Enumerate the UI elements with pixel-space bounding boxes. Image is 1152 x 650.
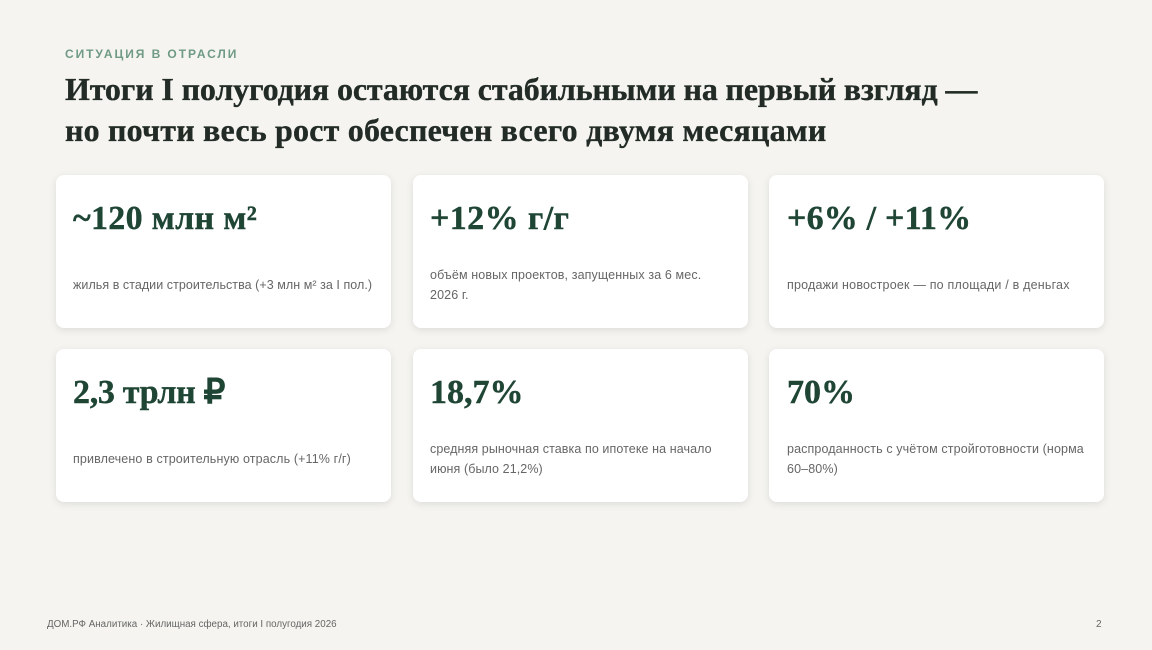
- page number: 2: [1096, 619, 1102, 630]
- footer source: ДОМ.РФ Аналитика · Жилищная сфера, итоги I полугодия 2026: [47, 619, 337, 630]
- description: [787, 442, 1084, 476]
- stat: 2.3 trillion: 2,3 трлн ₽: [73, 374, 225, 411]
- card: mortgage rate: [413, 349, 748, 502]
- eyebrow label: СИТУАЦИЯ В ОТРАСЛИ: [65, 47, 238, 61]
- description: распроданность с учётом стройготовности (норма: [787, 442, 1084, 456]
- stat: 12 percent: +12% г/г: [430, 200, 569, 237]
- description: июня (было 21,2%): [430, 462, 543, 476]
- description: средняя рыночная ставка по ипотеке на начало: [430, 442, 712, 456]
- description: объём новых проектов, запущенных за 6 мес.: [430, 268, 701, 282]
- card: sales: [769, 175, 1104, 328]
- description: [430, 268, 701, 302]
- stat: 18.7 percent: 18,7%: [430, 374, 524, 411]
- stat: 6 and 11 percent: +6% / +11%: [787, 200, 971, 237]
- card: housing under construction: [56, 175, 391, 328]
- description: привлечено в строительную отрасль (+11% г/г): [73, 452, 351, 466]
- stat: 120 million: ~120 млн м²: [73, 200, 257, 237]
- description: продажи новостроек — по площади / в деньгах: [787, 278, 1070, 292]
- title: [65, 71, 978, 148]
- card: funding: [56, 349, 391, 502]
- title: Итоги I полугодия остаются стабильными на первый взгляд —: [65, 71, 977, 107]
- title: но почти весь рост обеспечен всего двумя месяцами: [65, 112, 827, 148]
- card: sold share: [769, 349, 1104, 502]
- card: new projects: [413, 175, 748, 328]
- stat: 70 percent: 70%: [787, 374, 855, 411]
- description: 60–80%): [787, 462, 838, 476]
- description: жилья в стадии строительства (+3 млн м² за I пол.): [73, 278, 372, 292]
- description: 2026 г.: [430, 288, 469, 302]
- description: [430, 442, 712, 476]
